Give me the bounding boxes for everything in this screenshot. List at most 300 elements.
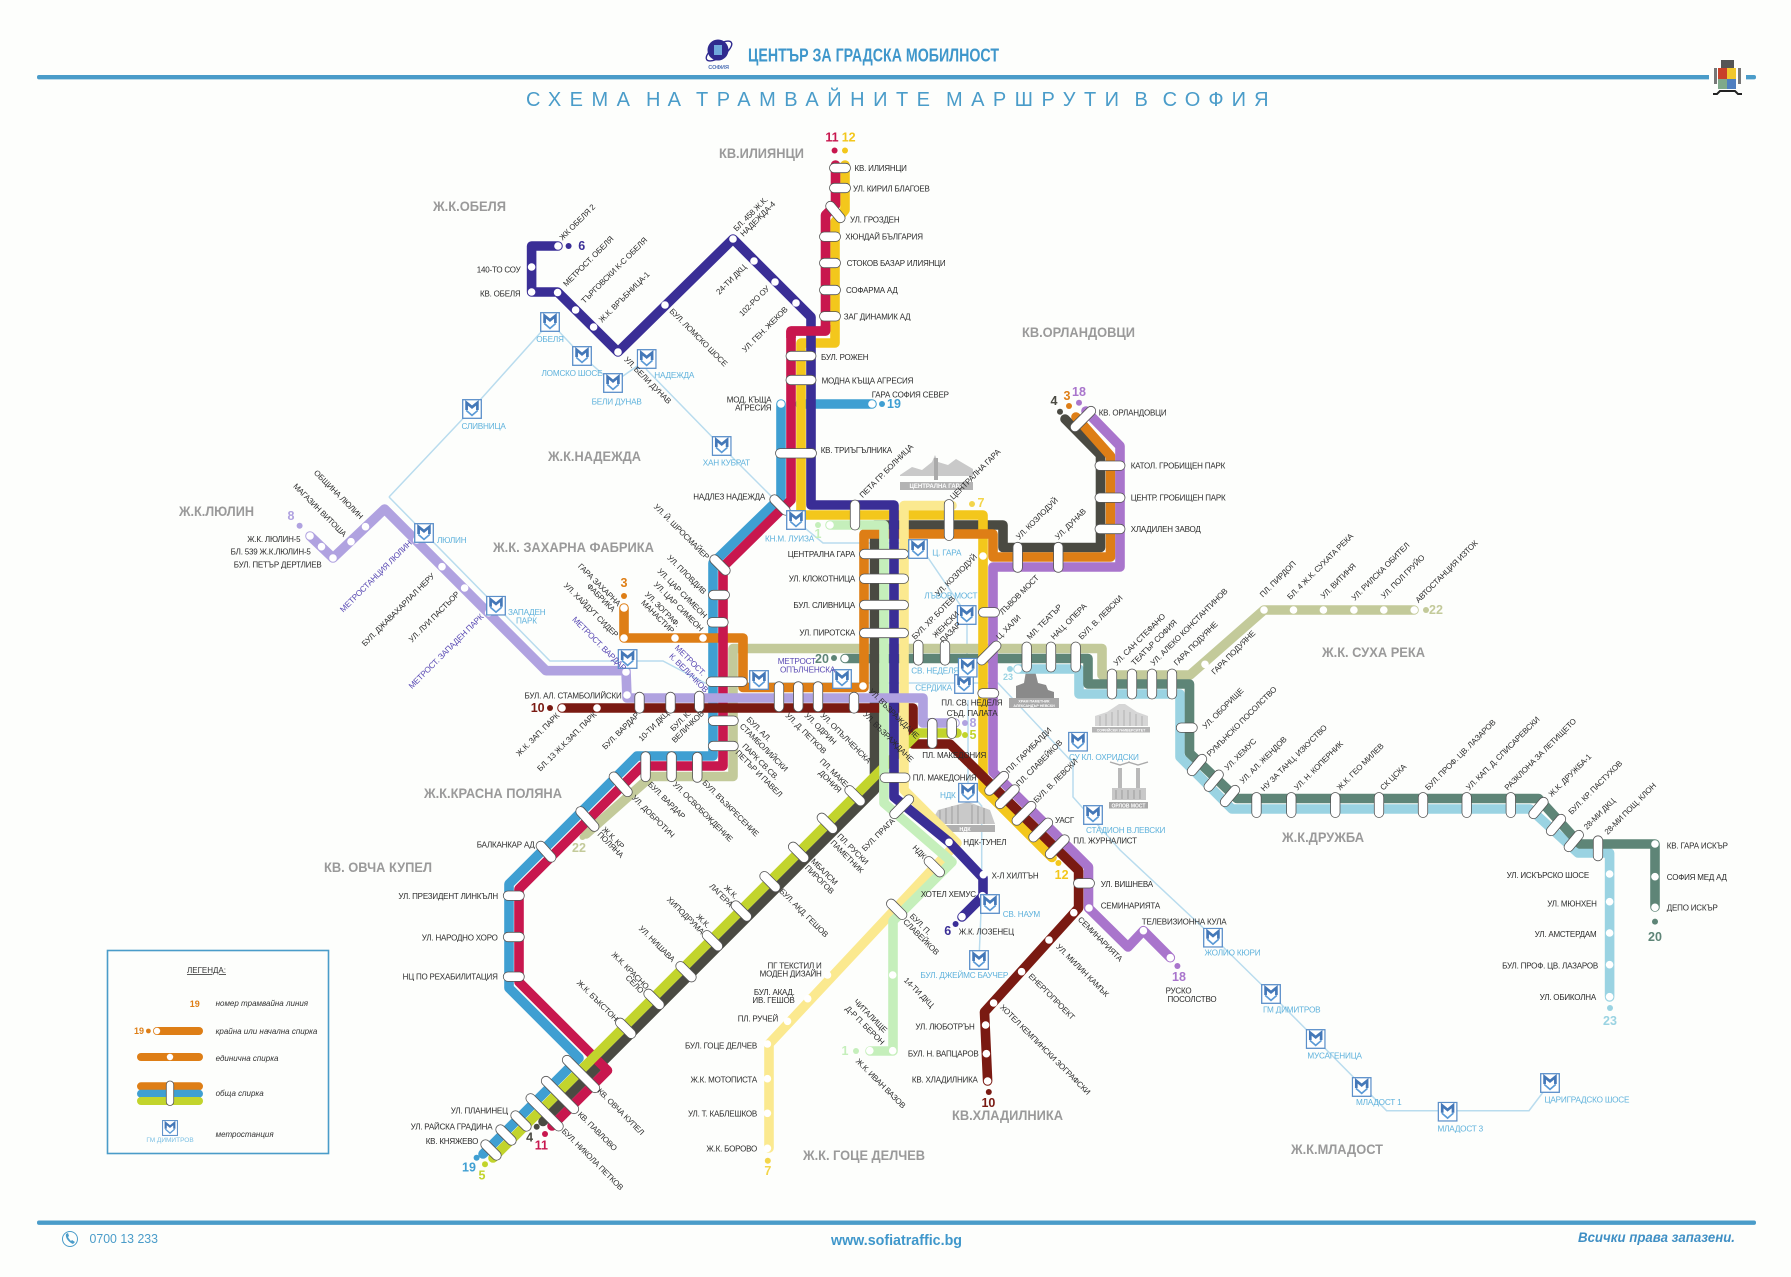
- metro stations: МЛАДОСТ 1: [1356, 1098, 1402, 1107]
- rotated stop labels falling right: УЛ. ОСВОБОЖДЕНИЕ: [671, 780, 735, 844]
- rotated stop labels rising right: Ж.К. ДРУЖБА-1: [1547, 752, 1594, 799]
- horizontal stop labels: БУЛ. АКАД.: [754, 988, 795, 997]
- line 6: [532, 239, 983, 917]
- rotated stop labels falling right: МАНАСТИР: [639, 598, 676, 635]
- rotated stop labels falling right: Ж.К. ИВАН ВАЗОВ: [854, 1057, 907, 1110]
- horizontal stop labels: КАТОЛ. ГРОБИЩЕН ПАРК: [1131, 462, 1226, 471]
- rotated stop labels rising right: [360, 195, 1658, 853]
- rotated stop labels falling right: ПАМЕТНИК: [829, 838, 865, 875]
- rotated stop labels rising right: БУЛ. ПРАГА: [860, 816, 897, 853]
- horizontal stop labels: БУЛ. ГОЦЕ ДЕЛЧЕВ: [685, 1041, 757, 1050]
- landmark: Sofia University sketch: [1092, 704, 1150, 732]
- route termini: dots and line numbers: 1: [815, 527, 822, 541]
- horizontal stop labels: БЛ. 539 Ж.К.ЛЮЛИН-5: [231, 548, 311, 557]
- rotated stop labels falling right: КВ. ПАВЛОВО: [576, 1110, 619, 1153]
- route termini: dots and line numbers: 8: [288, 509, 295, 523]
- horizontal stop labels: ЗАГ ДИНАМИК АД: [844, 312, 911, 321]
- rotated stop labels falling right: ФАБРИКА: [585, 582, 617, 614]
- rotated stop labels falling right: ОБЩИНА ЛЮЛИН: [312, 468, 365, 521]
- rotated stop labels rising right: ВЕЛИЧКОВ: [670, 709, 706, 745]
- rotated stop labels rising right: ПЛ. СЛАВЕЙКОВ: [1014, 738, 1064, 788]
- rotated stop labels rising right: Ц. ХАЛИ: [994, 613, 1023, 641]
- rotated stop labels falling right: ПЕТЪР И ПАВЕЛ: [734, 748, 784, 799]
- horizontal stop labels: КВ. ТРИЪГЪЛНИКА: [821, 446, 893, 455]
- landmark: Alexander Nevsky cathedral sketch: АЛЕКСАНДЪР НЕВСКИ: [1013, 704, 1055, 708]
- district names: Ж.К.ОБЕЛЯ: [432, 198, 506, 214]
- horizontal stop labels: КВ. ГАРА ИСКЪР: [1667, 841, 1728, 850]
- route termini: dots and line numbers: 23: [1003, 672, 1013, 682]
- horizontal stop labels: КВ. ОБЕЛЯ: [480, 290, 521, 299]
- metro stations: ПАРК: [516, 616, 537, 625]
- horizontal stop labels: УЛ. ГРОЗДЕН: [850, 216, 900, 225]
- horizontal stop labels: СОФАРМА АД: [846, 286, 898, 295]
- rotated stop labels falling right: ПОЛЯНА: [596, 830, 626, 860]
- metro-stop labels in purple: ОПЪЛЧЕНСКА: [780, 665, 836, 674]
- district names: КВ.ИЛИЯНЦИ: [719, 145, 804, 161]
- rotated stop labels rising right: УЛ. САН СТЕФАНО: [1112, 612, 1167, 667]
- horizontal stop labels: ПГ ТЕКСТИЛ И: [768, 961, 822, 970]
- legend heading: ЛЕГЕНДА:: [187, 966, 226, 975]
- horizontal stop labels: УЛ. ПИРОТСКА: [799, 628, 856, 637]
- logo: Sofia mobility centre: СОФИЯ: [708, 65, 729, 71]
- metro stations: СТАДИОН В.ЛЕВСКИ: [1086, 826, 1166, 835]
- legend: terminal stop: [134, 1026, 318, 1036]
- district names: Ж.К.НАДЕЖДА: [547, 448, 641, 464]
- rotated stop labels falling right: ПИРОГОВ: [803, 863, 836, 896]
- route termini: dots and line numbers: 18: [1172, 970, 1186, 984]
- rotated stop labels rising right: УЛ. КАП. Д. СПИСАРЕВСКИ: [1464, 715, 1542, 792]
- rotated stop labels falling right: ЧИТАЛИЩЕ: [852, 997, 889, 1034]
- line 8: [310, 509, 955, 723]
- rotated stop labels rising right: НАДЕЖДА-4: [739, 199, 778, 238]
- rotated stop labels falling right: УЛ. Д. ПЕТКОВ: [784, 711, 828, 756]
- district names: Ж.К. ЗАХАРНА ФАБРИКА: [492, 539, 654, 555]
- rotated stop labels rising right: Ж.К. ВРЪБНИЦА-1: [597, 270, 652, 324]
- rotated stop labels falling right: СЛАВЕЙКОВ: [901, 917, 941, 957]
- horizontal stop labels: КВ. КНЯЖЕВО: [426, 1137, 478, 1146]
- route termini: dots and line numbers: 10: [981, 1096, 995, 1110]
- rotated stop labels rising right: АВТОСТАНЦИЯ ИЗТОК: [1414, 538, 1480, 605]
- landmark: NDK sketch: [930, 802, 995, 833]
- rotated stop labels falling right: НДК: [911, 843, 928, 861]
- route termini: dots and line numbers: 22: [1429, 603, 1443, 617]
- rotated stop labels falling right: УЛ. ВЪЗРАЖДАНЕ: [867, 687, 921, 741]
- horizontal stop labels: МОД. КЪЩА: [727, 395, 772, 404]
- line 22: [586, 610, 1414, 834]
- horizontal stop labels: [231, 164, 1728, 1153]
- horizontal stop labels: Ж.К. БОРОВО: [706, 1144, 757, 1153]
- district names: КВ.ОРЛАНДОВЦИ: [1022, 324, 1135, 340]
- route termini: dots and line numbers: 5: [970, 728, 977, 742]
- horizontal stop labels: Ж.К. ЛОЗЕНЕЦ: [959, 928, 1014, 937]
- line 18: [993, 411, 1170, 958]
- rotated stop labels rising right: ЖЕНСКИ: [931, 609, 961, 640]
- rotated stop labels falling right: БУЛ. АКД. ГЕШОВ: [777, 887, 830, 939]
- tram route lines: [310, 165, 1655, 1158]
- metro stations: СЕРДИКА: [915, 684, 953, 693]
- rotated stop labels falling right: Ж.К. КРАСНО: [610, 950, 651, 991]
- horizontal stop labels: СЪД. ПАЛАТА: [947, 709, 998, 718]
- metro stations: БУЛ. ДЖЕЙМС БАУЧЕР: [920, 969, 1009, 980]
- rotated stop labels rising right: УЛ. ВИТИНЯ: [1319, 561, 1358, 600]
- metro stations: ЛЪВОВ МОСТ: [924, 592, 977, 601]
- route termini: dots and line numbers: 19: [462, 1161, 476, 1175]
- line 1: [830, 525, 952, 1051]
- route termini: dots and line numbers: 3: [1064, 389, 1071, 403]
- rotated stop labels rising right: РУМЪНСКО ПОСОЛСТВО: [1205, 685, 1278, 758]
- horizontal stop labels: КВ. ХЛАДИЛНИКА: [912, 1075, 979, 1084]
- title: ТРАМВАЙНИТЕ: [696, 87, 930, 111]
- rotated stop labels falling right: УЛ. ЦАР СИМЕОН: [656, 567, 709, 620]
- rotated stop labels rising right: УЛ. ПОЛ ГРУЙО: [1379, 553, 1427, 600]
- rotated stop labels falling right: ЕНЕРГОПРОЕКТ: [1027, 972, 1077, 1022]
- horizontal stop labels: УЛ. ОБИКОЛНА: [1540, 993, 1597, 1002]
- legend: terminal stop: 19: [134, 1026, 144, 1036]
- legend: shared stop: [137, 1081, 264, 1106]
- rotated stop labels falling right: ПЛ. РУСКИ: [835, 832, 870, 867]
- horizontal stop labels: УЛ. ИСКЪРСКО ШОСЕ: [1507, 871, 1589, 880]
- panel: legend: [108, 950, 328, 1154]
- metro-stop labels in purple: МЕТРОСТ. ЗАПАДЕН ПАРК: [407, 612, 486, 691]
- horizontal stop labels: ПЛ. МАКЕДОНИЯ: [913, 774, 977, 783]
- rotated stop labels rising right: МЛ. ТЕАТЪР: [1025, 603, 1064, 641]
- rotated stop labels rising right: Ж.К. ГЕО МИЛЕВ: [1335, 742, 1386, 792]
- legend: line number: [190, 999, 309, 1009]
- rotated stop labels rising right: УЛ. Н. КОПЕРНИК: [1292, 739, 1345, 792]
- legend: metro station: [146, 1121, 274, 1144]
- metro-stop labels in purple: [338, 538, 836, 695]
- horizontal stop labels: УЛ. ПЛАНИНЕЦ: [451, 1107, 508, 1116]
- rotated stop labels rising right: УЛ. ДУНАВ: [1053, 507, 1088, 541]
- metro stations: ОБЕЛЯ: [536, 335, 564, 344]
- horizontal stop labels: 140-ТО СОУ: [477, 266, 522, 275]
- landmark: Central Station sketch: ЦЕНТРАЛНА ГАРА: [910, 484, 964, 490]
- route termini: dots and line numbers: 1: [842, 1044, 849, 1058]
- route termini: dots and line numbers: 11: [825, 130, 839, 144]
- rotated stop labels falling right: МАГАЗИН ВИТОША: [291, 482, 349, 539]
- horizontal stop labels: ГАРА СОФИЯ СЕВЕР: [872, 391, 949, 400]
- district names: Ж.К.КРАСНА ПОЛЯНА: [423, 785, 562, 801]
- route termini: dots and line numbers: [288, 130, 1662, 1183]
- rotated stop labels falling right: 14-ТИ ДКЦ: [902, 976, 936, 1010]
- line 4: [543, 419, 1100, 1122]
- metro-stop labels in purple: МЕТРОСТ.: [673, 643, 707, 678]
- rotated stop labels rising right: БУЛ. КР. ПАСТУХОВ: [1567, 759, 1624, 816]
- rotated stop labels falling right: СТАМБОЛИЙСКИ: [738, 722, 790, 774]
- horizontal stop labels: ХЮНДАЙ БЪЛГАРИЯ: [845, 233, 923, 242]
- landmark: Orlov Most sketch: [1109, 762, 1148, 809]
- horizontal stop labels: КВ. ИЛИЯНЦИ: [854, 164, 907, 173]
- horizontal stop labels: ИВ. ГЕШОВ: [752, 996, 795, 1005]
- horizontal stop labels: ЦЕНТРАЛНА ГАРА: [788, 550, 856, 559]
- rotated stop labels rising right: УЛ. КОЗЛОДУЙ: [933, 552, 979, 598]
- rotated stop labels rising right: ЦЕНТРАЛНА ГАРА: [948, 447, 1003, 501]
- legend: single stop: единична спирка: [216, 1054, 279, 1063]
- line 20: [845, 658, 1655, 907]
- metro stations: СВ. НАУМ: [1003, 910, 1040, 919]
- title: МАРШРУТИ: [946, 89, 1119, 111]
- rotated stop labels falling right: ХИПОДРУМА: [665, 895, 706, 936]
- horizontal stop labels: ТЕЛЕВИЗИОННА КУЛА: [1142, 918, 1227, 927]
- rotated stop labels falling right: УЛ. ВЪЗРАЖДАНЕ: [861, 710, 915, 764]
- metro stations: ХАН КУБРАТ: [703, 459, 750, 468]
- rotated stop labels rising right: БУЛ. К.: [669, 709, 693, 733]
- rotated stop labels falling right: ХОТЕЛ КЕМПИНСКИ ЗОГРАФСКИ: [998, 1003, 1092, 1097]
- horizontal stop labels: ХОТЕЛ ХЕМУС: [921, 890, 976, 899]
- rotated stop labels rising right: УЛ. АЛ. ЖЕНДОВ: [1238, 735, 1289, 785]
- horizontal stop labels: Ж.К. ЛЮЛИН-5: [247, 535, 301, 544]
- route termini: dots and line numbers: 18: [1072, 385, 1086, 399]
- landmark: Alexander Nevsky cathedral sketch: ХРАМ ПАМЕТНИК: [1018, 700, 1050, 704]
- horizontal stop labels: УЛ. АМСТЕРДАМ: [1535, 930, 1597, 939]
- rotated stop labels rising right: 10-ТИ ДКЦ: [637, 709, 671, 743]
- rotated stop labels falling right: Ж.К.: [722, 883, 740, 901]
- route termini: dots and line numbers: 12: [842, 130, 856, 144]
- horizontal stop labels: ДЕПО ИСКЪР: [1667, 904, 1718, 913]
- horizontal stop labels: БУЛ. СЛИВНИЦА: [793, 601, 856, 610]
- horizontal stop labels: РУСКО: [1166, 987, 1191, 996]
- metro stations: СУ КЛ. ОХРИДСКИ: [1069, 753, 1139, 762]
- icon: phone: [62, 1232, 78, 1246]
- footer rights note: Всички права запазени.: [1578, 1230, 1735, 1245]
- horizontal stop labels: ПЛ. МАКЕДОНИЯ: [922, 751, 987, 760]
- horizontal stop labels: Х-Л ХИЛТЪН: [992, 871, 1039, 880]
- route termini: dots and line numbers: 12: [1055, 868, 1069, 882]
- horizontal stop labels: УЛ. ПРЕЗИДЕНТ ЛИНКЪЛН: [398, 892, 498, 901]
- metro stations: [415, 313, 1630, 1133]
- route termini: dots and line numbers: 10: [531, 701, 545, 715]
- rotated stop labels falling right: БУЛ. ЛОМСКО ШОСЕ: [668, 307, 729, 368]
- rotated stop labels falling right: УЛ. НИШАВА: [637, 924, 677, 964]
- rotated stop labels falling right: ГАРА ЗАХАРНА: [576, 562, 623, 609]
- rotated stop labels falling right: УЛ. БЕЛИ ДУНАВ: [622, 355, 673, 406]
- district names: [178, 145, 1425, 1163]
- title: [526, 87, 1269, 111]
- horizontal stop labels: СТОКОВ БАЗАР ИЛИЯНЦИ: [847, 259, 946, 268]
- route termini: dots and line numbers: 3: [621, 576, 628, 590]
- rotated stop labels rising right: РАЗКЛОНА ЗА ЛЕТИЩЕТО: [1503, 717, 1578, 792]
- route termini: dots and line numbers: 23: [1603, 1014, 1617, 1028]
- footer website: www.sofiatraffic.bg: [830, 1233, 962, 1249]
- route termini: dots and line numbers: 6: [578, 239, 585, 253]
- rotated stop labels rising right: ПЛ. ГАРИБАЛДИ: [1004, 726, 1054, 775]
- metro stations: НДК: [940, 791, 956, 800]
- metro stations: КН.М. ЛУИЗА: [765, 534, 815, 543]
- route termini: dots and line numbers: 20: [1648, 930, 1662, 944]
- rotated stop labels falling right: Ж.К.: [694, 912, 712, 930]
- rotated stop labels rising right: Ж.К. ЗАП. ПАРК: [514, 711, 562, 758]
- horizontal stop labels: ПОСОЛСТВО: [1168, 995, 1216, 1004]
- title: В: [1134, 89, 1148, 111]
- line 12: [801, 165, 1052, 858]
- horizontal stop labels: БУЛ. АЛ. СТАМБОЛИЙСКИ: [525, 691, 622, 700]
- rotated stop labels falling right: БУЛ. НИКОЛА ПЕТКОВ: [560, 1127, 625, 1192]
- rotated stop labels rising right: УЛ. КОЗЛОДУЙ: [1014, 496, 1060, 541]
- rotated stop labels falling right: Ж.К. БЪКСТОН: [575, 978, 620, 1023]
- horizontal stop labels: ПЛ. РУЧЕЙ: [738, 1015, 778, 1024]
- metro stations: ЗАПАДЕН: [508, 608, 546, 617]
- horizontal stop labels: Ж.К. МОТОПИСТА: [690, 1075, 758, 1084]
- horizontal stop labels: НАДЛЕЗ НАДЕЖДА: [693, 493, 766, 502]
- route termini: dots and line numbers: 4: [526, 1131, 533, 1145]
- metro-stop labels in purple: МЕТРОСТ. ВАРДАР: [570, 615, 628, 673]
- rotated stop labels rising right: БУЛ. ВАРДАР: [600, 711, 641, 751]
- rotated stop labels rising right: УЛ. ГЕН. ЖЕКОВ: [740, 305, 790, 354]
- horizontal stop labels: СЕМИНАРИЯТА: [1101, 901, 1161, 910]
- landmark: Central Station sketch: [900, 455, 973, 490]
- rotated stop labels rising right: ГАРА ПОДУЯНЕ: [1172, 620, 1220, 667]
- rotated stop labels rising right: УЛ. ЛУИ ПАСТЬОР: [407, 590, 461, 644]
- header rule: [37, 75, 1756, 79]
- district names: КВ.ХЛАДИЛНИКА: [952, 1107, 1063, 1123]
- metro stations: МЛАДОСТ 3: [1438, 1124, 1484, 1133]
- shared stop pills: [479, 163, 1603, 1162]
- line 5: [493, 733, 957, 1158]
- horizontal stop labels: УЛ. НАРОДНО ХОРО: [422, 933, 498, 942]
- rotated stop labels rising right: СК ЦСКА: [1378, 762, 1409, 792]
- landmark: Orlov Most sketch: ОРЛОВ МОСТ: [1112, 803, 1145, 809]
- single-line stops: [306, 235, 1659, 1152]
- legend: metro station: ГМ ДИМИТРОВ: [146, 1137, 194, 1144]
- rotated stop labels rising right: БУЛ. ДЖАВАХАРЛАЛ НЕРУ: [360, 571, 437, 648]
- metro stations: ГМ ДИМИТРОВ: [1263, 1005, 1321, 1014]
- rotated stop labels rising right: БЛ. 458 Ж.К.: [732, 195, 770, 233]
- rotated stop labels falling right: ЛАГЕРА: [707, 882, 735, 909]
- horizontal stop labels: ЦЕНТР. ГРОБИЩЕН ПАРК: [1131, 494, 1226, 503]
- rotated stop labels falling right: УЛ. МИЛИН КАМЪК: [1054, 942, 1111, 999]
- footer rule: [37, 1220, 1756, 1225]
- rotated stop labels rising right: 28-МИ ПОЩ. КЛОН: [1603, 781, 1658, 836]
- rotated stop labels falling right: МБАЛСМ: [809, 857, 840, 887]
- district names: Ж.К.МЛАДОСТ: [1290, 1141, 1383, 1157]
- rotated stop labels falling right: БУЛ. ВАРДАР: [646, 780, 687, 821]
- district names: КВ. ОВЧА КУПЕЛ: [324, 859, 432, 875]
- rotated stop labels rising right: ЖК ОБЕЛЯ 2: [558, 202, 598, 242]
- line 19 branch: [800, 399, 872, 409]
- rotated stop labels falling right: БУЛ. ВЪЗКРЕСЕНИЕ: [700, 778, 760, 838]
- rotated stop labels falling right: ПАРК СВ.СВ.: [740, 742, 780, 782]
- metro stations: СВ. НЕДЕЛЯ: [911, 667, 959, 676]
- route termini: dots and line numbers: 19: [887, 397, 901, 411]
- legend: metro station: метростанция: [216, 1130, 274, 1139]
- horizontal stop labels: БУЛ. ПРОФ. ЦВ. ЛАЗАРОВ: [1502, 961, 1598, 970]
- district names: Ж.К. ГОЦЕ ДЕЛЧЕВ: [802, 1147, 925, 1163]
- route termini: dots and line numbers: 6: [944, 924, 951, 938]
- rotated stop labels falling right: УЛ. ЦАР СИМЕОН: [652, 580, 705, 633]
- route termini: dots and line numbers: 20: [815, 652, 829, 666]
- rotated stop labels falling right: БУЛ. П.: [908, 912, 933, 937]
- horizontal stop labels: УЛ. КЛОКОТНИЦА: [789, 574, 856, 583]
- horizontal stop labels: ПЛ. ЖУРНАЛИСТ: [1073, 837, 1137, 846]
- metro line network: [389, 322, 1550, 1111]
- horizontal stop labels: НДК-ТУНЕЛ: [963, 838, 1006, 847]
- horizontal stop labels: СОФИЯ МЕД АД: [1667, 873, 1727, 882]
- landmark: Alexander Nevsky cathedral sketch: [1009, 671, 1059, 708]
- horizontal stop labels: ХЛАДИЛЕН ЗАВОД: [1131, 525, 1201, 534]
- landmark: Sofia University sketch: СОФИЙСКИ УНИВЕРСИТЕТ: [1097, 728, 1146, 732]
- rotated stop labels falling right: УЛ. Й. ШРОСМАЙЕР: [652, 502, 711, 561]
- header organisation name: ЦЕНТЪР ЗА ГРАДСКА МОБИЛНОСТ: [748, 46, 999, 66]
- horizontal stop labels: УЛ. ЛЮБОТРЪН: [915, 1022, 975, 1031]
- legend: line number: 19: [190, 999, 200, 1009]
- title: СОФИЯ: [1163, 89, 1269, 111]
- horizontal stop labels: МОДЕН ДИЗАЙН: [760, 969, 822, 978]
- rotated stop labels rising right: БУЛ. ХР. БОТЕВ: [910, 595, 957, 641]
- rotated stop labels falling right: ПЛ. МАКЕ-: [818, 757, 852, 791]
- route termini: dots and line numbers: 4: [1051, 394, 1058, 408]
- legend: line number: номер трамвайна линия: [216, 999, 309, 1008]
- line 19: [483, 404, 781, 1154]
- footer phone number: 0700 13 233: [90, 1231, 158, 1246]
- rotated stop labels rising right: МЕТРОСТ. ОБЕЛЯ: [561, 234, 616, 288]
- rotated stop labels falling right: УЛ. ПЛОВДИВ: [665, 553, 708, 596]
- line 11 overpass above line 6: [791, 325, 826, 338]
- metro stations: НАДЕЖДА: [654, 371, 695, 380]
- horizontal stop labels: БУЛ. ПЕТЪР ДЕРТЛИЕВ: [234, 561, 322, 570]
- rotated stop labels falling right: УЛ. ХАЙДУТ СИДЕР: [562, 581, 620, 639]
- icon: Sofia coat of arms: [1709, 57, 1746, 97]
- horizontal stop labels: БУЛ. РОЖЕН: [821, 353, 869, 362]
- route termini: dots and line numbers: 5: [479, 1169, 486, 1183]
- line 3: [624, 417, 1110, 688]
- rotated stop labels falling right: Д-Р П. БЕРОН: [843, 1004, 886, 1047]
- legend: shared stop: обща спирка: [216, 1089, 264, 1098]
- rotated stop labels rising right: УЛ. ОБОРИЩЕ: [1201, 686, 1245, 731]
- rotated stop labels falling right: СЕЛО: [624, 973, 645, 995]
- rotated stop labels rising right: БЛ. 13 Ж.К.ЗАП. ПАРК: [535, 710, 599, 773]
- route termini: dots and line numbers: 7: [978, 496, 985, 510]
- horizontal stop labels: НЦ ПО РЕХАБИЛИТАЦИЯ: [403, 973, 498, 982]
- horizontal stop labels: МОДНА КЪЩА АГРЕСИЯ: [822, 376, 914, 385]
- horizontal stop labels: УЛ. Т. КАБЛЕШКОВ: [688, 1109, 757, 1118]
- rotated stop labels rising right: НАЦ. ОПЕРА: [1049, 601, 1089, 641]
- horizontal stop labels: БУЛ. Н. ВАПЦАРОВ: [908, 1050, 978, 1059]
- legend: terminal stop: крайна или начална спирка: [216, 1027, 318, 1036]
- legend: single stop: [137, 1053, 279, 1063]
- district names: Ж.К.ЛЮЛИН: [178, 503, 254, 519]
- horizontal stop labels: УЛ. ВИШНЕВА: [1101, 880, 1154, 889]
- rotated stop labels rising right: УЛ. РИЛСКА ОБИТЕЛ: [1350, 541, 1411, 602]
- line 7: [769, 506, 957, 1148]
- metro stations: ЖОЛИО КЮРИ: [1204, 948, 1261, 957]
- rotated stop labels falling right: БУЛ. АЛ.: [745, 715, 773, 743]
- route termini: dots and line numbers: 11: [535, 1139, 548, 1153]
- metro-stop labels in purple: МЕТРОСТАНЦИЯ ЛЮЛИН: [338, 538, 414, 614]
- route termini: dots and line numbers: 22: [572, 841, 586, 855]
- horizontal stop labels: УАСГ: [1055, 816, 1075, 825]
- landmark: NDK sketch: НДК: [959, 827, 971, 833]
- line 23: [1018, 669, 1610, 997]
- rotated stop labels rising right: 28-МИ ДКЦ: [1582, 796, 1617, 831]
- rotated stop labels rising right: УЛ. ХЕМУС: [1223, 737, 1258, 772]
- rotated stop labels rising right: ГАРА ПОДУЯНЕ: [1210, 629, 1257, 676]
- rotated stop labels falling right: СЕМИНАРИЯТА: [1076, 915, 1125, 964]
- line 11: [519, 165, 836, 1126]
- rotated stop labels rising right: ПАЗАР: [938, 620, 963, 645]
- horizontal stop labels: АГРЕСИЯ: [735, 404, 772, 413]
- rotated stop labels rising right: ТЕАТЪР СОФИЯ: [1129, 618, 1179, 667]
- district names: Ж.К. СУХА РЕКА: [1321, 644, 1425, 660]
- horizontal stop labels: УЛ. КИРИЛ БЛАГОЕВ: [853, 185, 930, 194]
- rotated stop labels rising right: БУЛ. В. ЛЕВСКИ: [1032, 757, 1080, 805]
- rotated stop labels rising right: БУЛ. ПРОФ. ЦВ. ЛАЗАРОВ: [1423, 718, 1498, 792]
- rotated stop labels rising right: ПЕТА ГР. БОЛНИЦА: [858, 442, 916, 500]
- metro stations: МУСАГЕНИЦА: [1307, 1051, 1363, 1060]
- district names: Ж.К.ДРУЖБА: [1281, 829, 1364, 845]
- metro stations: ЦАРИГРАДСКО ШОСЕ: [1544, 1095, 1630, 1104]
- horizontal stop labels: УЛ. РАЙСКА ГРАДИНА: [411, 1123, 493, 1132]
- rotated stop labels falling right: УЛ. ОПЪЛЧЕНСКА: [819, 711, 873, 766]
